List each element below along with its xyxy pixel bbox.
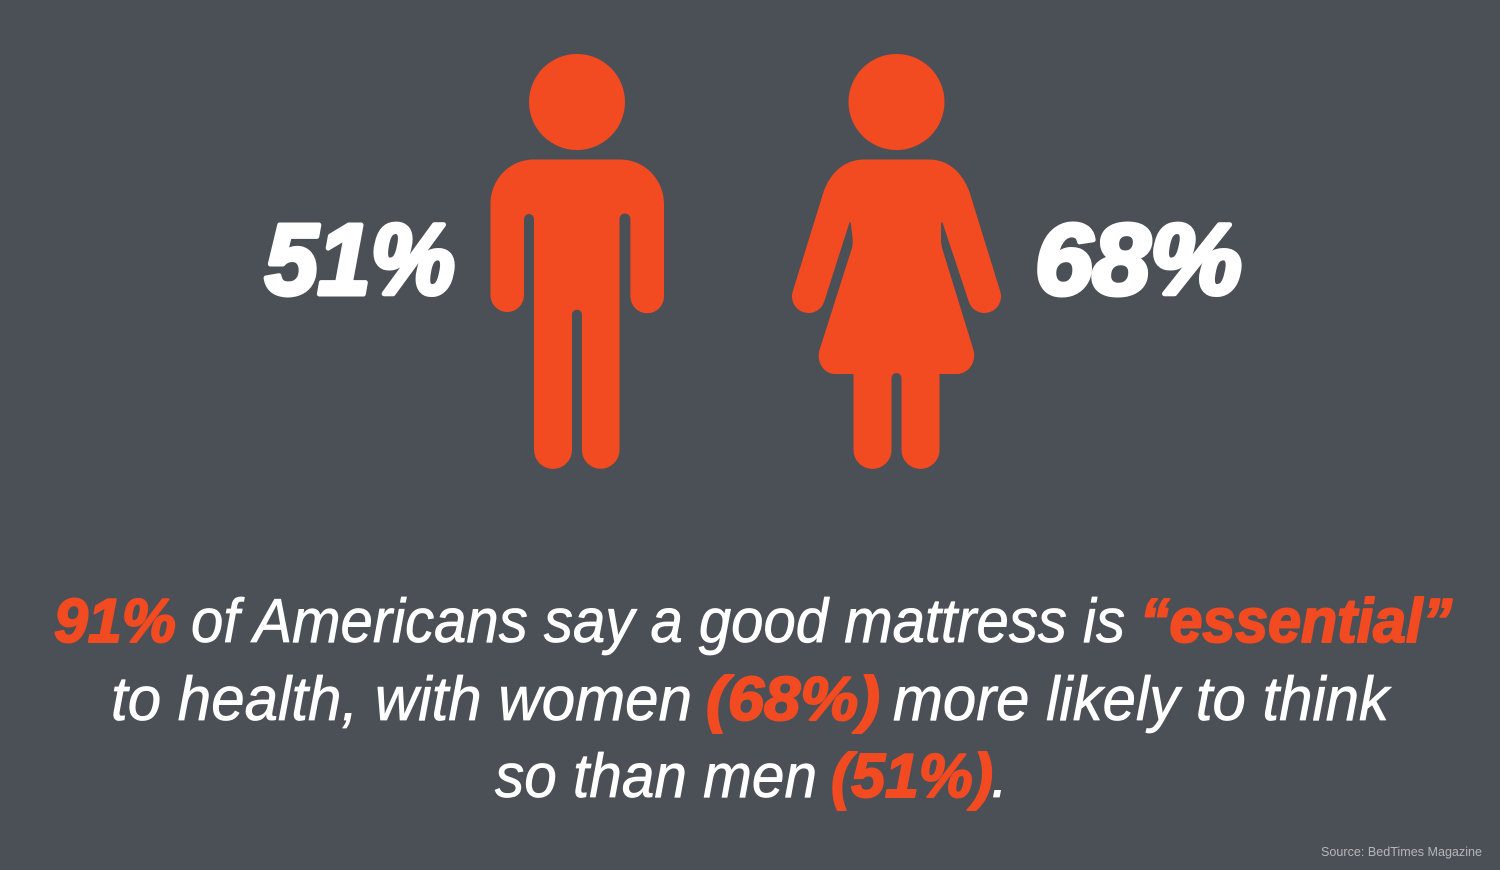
line 3 highlight: 51%: (51%)	[831, 742, 993, 811]
line 2 highlight: 68%: (68%)	[706, 665, 880, 734]
stat: men 51%: 51%	[265, 204, 455, 316]
source credit: Source: BedTimes Magazine	[1321, 845, 1482, 859]
line 2 body start: to health, with women	[111, 665, 692, 734]
icon: man	[490, 54, 664, 469]
line 2 body end: more likely to think	[893, 665, 1392, 734]
line 1 body: of Americans say a good mattress is	[191, 587, 1125, 656]
icon: woman	[792, 54, 1001, 469]
line 1 highlight: 91%: 91%	[54, 587, 176, 656]
line 3 period: .	[991, 742, 1008, 811]
line 3 body start: so than men	[495, 742, 817, 811]
stat: women 68%: 68%	[1035, 204, 1242, 316]
line 1 highlight: essential: “essential”	[1140, 587, 1452, 656]
statement text	[54, 587, 1452, 811]
